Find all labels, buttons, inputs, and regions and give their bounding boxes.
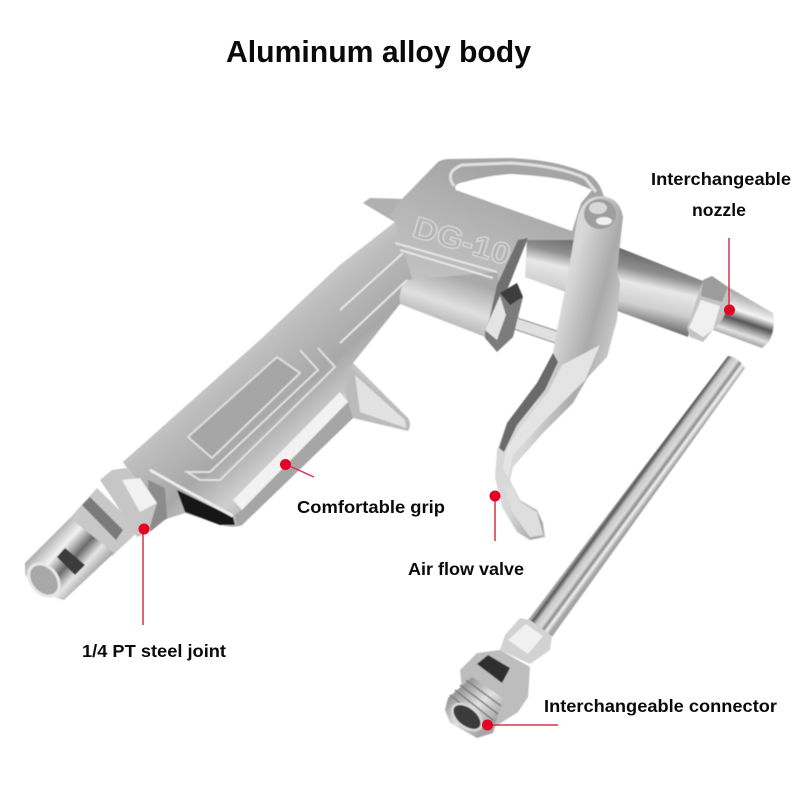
callout: comfortable grip (280, 459, 445, 517)
callout: comfortable grip: Comfortable grip (297, 497, 445, 517)
quick joint (22, 468, 167, 602)
air gun body (123, 158, 774, 527)
grip channel lines (187, 348, 335, 480)
callout: interchangeable connector: Interchangeable connector (544, 696, 777, 716)
front fin highlight (363, 198, 402, 222)
grip highlight (233, 392, 348, 510)
thread (445, 677, 503, 738)
lever tip (504, 485, 543, 537)
joint opening (22, 558, 66, 602)
trigger lever (495, 196, 623, 540)
white gap under block (354, 314, 484, 385)
recessed grip panel (188, 357, 300, 458)
neck to body (148, 480, 167, 532)
sleeve glint (57, 548, 85, 575)
nozzle (687, 276, 774, 348)
body ridge lines (340, 243, 497, 343)
barrel (525, 230, 703, 337)
hex nut (485, 283, 523, 352)
engraved DG-10 mark: DG-10 (409, 211, 514, 272)
block cut edge (487, 238, 528, 330)
lever shadow edge (499, 353, 558, 452)
hole in handle (455, 174, 592, 231)
connector hex (460, 650, 530, 730)
rear block (400, 272, 500, 337)
callout: interchangeable nozzle: nozzle (692, 200, 746, 220)
callout: interchangeable connector (482, 696, 777, 730)
callout: interchangeable nozzle (651, 169, 791, 316)
callout: steel joint: 1/4 PT steel joint (82, 641, 226, 661)
callout: air flow valve: Air flow valve (408, 559, 524, 579)
pin rod (508, 315, 560, 344)
neck (70, 488, 140, 556)
rod collar (500, 618, 552, 664)
rivet (584, 199, 616, 229)
grip (123, 222, 412, 527)
hex head (100, 468, 157, 537)
interchangeable extension rod (445, 356, 745, 738)
handle loop rim (450, 163, 596, 192)
lever inner face (503, 345, 600, 478)
grip opening (177, 490, 235, 525)
grip underside (235, 402, 353, 526)
title: Aluminum alloy body (226, 34, 532, 69)
callout: interchangeable nozzle: Interchangeable (651, 169, 791, 189)
callout: air flow valve (408, 490, 524, 579)
callout: steel joint (82, 524, 226, 661)
handle loop and top of body (123, 158, 604, 527)
rear fin (345, 365, 410, 431)
connector opening (447, 699, 487, 735)
sleeve (25, 518, 114, 600)
